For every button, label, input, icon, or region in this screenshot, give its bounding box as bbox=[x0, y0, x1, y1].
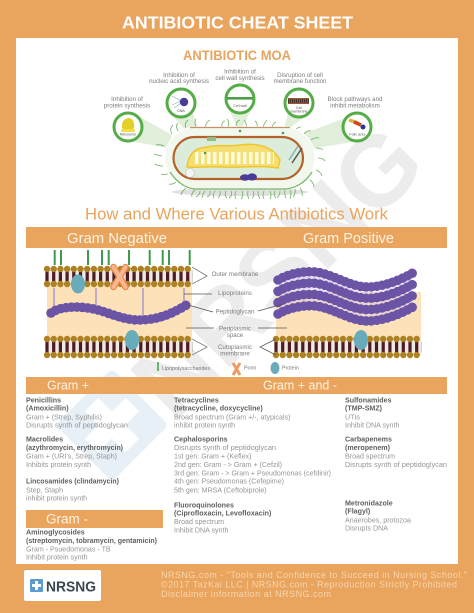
peptidoglycan bbox=[51, 304, 188, 320]
drug list: broad spectrum right: (meropenem) bbox=[345, 444, 391, 452]
drug list: broad spectrum middle: Fluoroquinolones bbox=[174, 501, 234, 509]
diagram labels: Peptidoglycan bbox=[216, 308, 255, 316]
callout: cell membrane function: membrane bbox=[290, 110, 308, 114]
banner: gram negative and gram positive bbox=[26, 227, 447, 248]
lilac gaps bbox=[280, 277, 414, 315]
watermark: NRSNG bbox=[110, 104, 445, 439]
drug list: gram positive: (Amoxicillin) bbox=[26, 405, 69, 413]
drug list: gram positive: (azythromycin, erythromycin) bbox=[26, 444, 124, 452]
protein in inner membrane bbox=[125, 330, 139, 350]
inner membrane bbox=[45, 339, 193, 355]
plasmid blob bbox=[240, 173, 257, 181]
diagram labels: Outer membrane bbox=[212, 271, 259, 278]
membrane protein bbox=[354, 330, 368, 350]
callout: protein synthesis: Ribosome bbox=[120, 132, 136, 136]
diagram: gram negative wall bbox=[45, 250, 193, 355]
drug list: broad spectrum right: Carbapenems bbox=[345, 436, 392, 444]
outer membrane bbox=[45, 269, 193, 284]
footer logo bbox=[24, 570, 101, 601]
callout: cell wall synthesis: Cell wall bbox=[233, 104, 247, 108]
drug list: gram negative: Inhibit protein synth bbox=[26, 554, 88, 562]
drug list: gram negative: Gram - Psuedomonas - TB bbox=[26, 546, 111, 554]
drug list: broad spectrum middle: 1st gen: Gram + (Keflex) bbox=[174, 452, 251, 460]
banner: gram negative list: Gram - bbox=[46, 512, 88, 526]
drug list: gram positive bbox=[26, 396, 128, 502]
drug list: gram positive: Penicillins bbox=[26, 396, 61, 404]
drug list: broad spectrum right: Inhibit DNA synth bbox=[345, 422, 399, 430]
bacterium cell bbox=[154, 119, 325, 199]
callout: nucleic acid synthesis: DNA bbox=[177, 109, 185, 113]
drug list: gram positive: Macrolides bbox=[26, 436, 63, 444]
banner: gram negative and gram positive: Gram Negative bbox=[67, 230, 167, 247]
banner: gram negative list bbox=[26, 510, 163, 528]
lipoproteins bbox=[54, 288, 184, 318]
drug list: broad spectrum middle bbox=[174, 396, 331, 534]
footer text: ©2017 TazKai LLC | NRSNG.com - Reproduction Strictly Prohibited bbox=[161, 580, 457, 590]
connector lines bbox=[184, 267, 287, 355]
drug list: broad spectrum right: (TMP-SMZ) bbox=[345, 405, 383, 413]
pili hairs bbox=[154, 119, 325, 199]
drug list: broad spectrum right: (Flagyl) bbox=[345, 508, 371, 516]
drug list: gram negative: (streptomycin, tobramycin, gentamicin) bbox=[26, 537, 158, 545]
callout: cell membrane function bbox=[274, 72, 327, 117]
callout: nucleic acid synthesis: nucleic acid synthesis bbox=[149, 78, 209, 85]
callout: cell membrane function: Cell bbox=[296, 106, 302, 110]
porin bbox=[114, 267, 126, 287]
drug list: gram positive: Step, Staph bbox=[26, 486, 63, 494]
callout: protein synthesis bbox=[104, 96, 150, 141]
footer text bbox=[161, 570, 467, 599]
diagram: antibiotic mechanisms of action bbox=[104, 68, 383, 199]
callout: nucleic acid synthesis: Inhibition of bbox=[163, 72, 195, 79]
legend bbox=[158, 362, 299, 375]
callout: protein synthesis: Inhibition of bbox=[111, 96, 143, 103]
footer text: Disclaimer information at NRSNG.com bbox=[161, 589, 331, 599]
drug list: broad spectrum middle: 5th gen: MRSA (Ceftobiprole) bbox=[174, 486, 267, 494]
drug list: broad spectrum middle: Inhibit DNA synth bbox=[174, 526, 228, 534]
drug list: gram negative bbox=[26, 528, 158, 562]
drug list: gram positive: Inhibits protein synth bbox=[26, 461, 91, 469]
drug list: gram positive: inhibit protein synth bbox=[26, 494, 87, 502]
drug list: broad spectrum right: Broad spectrum bbox=[345, 452, 395, 460]
drug list: broad spectrum middle: inhibit protein synth bbox=[174, 422, 235, 430]
periplasmic space bbox=[276, 292, 421, 340]
diagram: gram positive wall bbox=[274, 271, 422, 355]
drug list: broad spectrum middle: 2nd gen: Gram - > Gram + (Cefzil) bbox=[174, 461, 282, 469]
drug list: gram positive: Lincosamides (clindamycin) bbox=[26, 478, 120, 486]
callout: nucleic acid synthesis bbox=[149, 72, 209, 117]
cytoplasmic membrane bbox=[274, 339, 422, 355]
drug list: broad spectrum right: Disrupts synth of peptidoglycan bbox=[345, 461, 447, 469]
drug list: broad spectrum right: UTIs bbox=[345, 413, 360, 421]
callout: cell membrane function: Disruption of cell bbox=[277, 72, 323, 79]
callout: block metabolism: inhibit metabolism bbox=[330, 102, 380, 110]
diagram labels: membrane bbox=[220, 350, 250, 358]
peptidoglycan layers bbox=[278, 271, 416, 321]
drug list: broad spectrum right: Sulfonamides bbox=[345, 396, 392, 404]
drug list: gram negative: Aminoglycosides bbox=[26, 528, 85, 536]
drug list: gram positive: Disrupts synth of peptidoglycan bbox=[26, 422, 128, 430]
diagram labels: Cutoplasmic bbox=[218, 344, 252, 351]
footer text: NRSNG.com - "Tools and Confidence to Succeed in Nursing School." bbox=[161, 570, 467, 580]
drug list: broad spectrum middle: 3rd gen: Gram - > Gram + Pseudomonas (cefdinir) bbox=[174, 469, 331, 477]
drug list: broad spectrum right: Anaerobes, protozoa bbox=[345, 516, 411, 524]
drug list: broad spectrum middle: (tetracycline, doxycycline) bbox=[174, 405, 263, 413]
drug list: broad spectrum middle: Broad spectrum (Gram +/-, atypicals) bbox=[174, 413, 290, 421]
title: ANTIBIOTIC CHEAT SHEET bbox=[122, 12, 353, 32]
antibiotic rods bbox=[289, 146, 298, 160]
drug list: broad spectrum middle: 4th gen: Pseudomonas (Cefepime) bbox=[174, 478, 284, 486]
heading: how and where: How and Where Various Antibiotics Work bbox=[85, 206, 389, 224]
protein in outer membrane bbox=[71, 274, 85, 294]
banner: gram negative and gram positive: Gram Positive bbox=[303, 230, 394, 247]
diagram labels: space bbox=[227, 332, 244, 339]
heading: antibiotic MOA: ANTIBIOTIC MOA bbox=[183, 48, 291, 63]
callout: cell membrane function: membrane function bbox=[274, 78, 327, 85]
callout: protein synthesis: protein synthesis bbox=[104, 102, 150, 110]
drug list: broad spectrum middle: Broad spectrum bbox=[174, 518, 224, 526]
diagram labels: Lipoproteins bbox=[218, 290, 252, 297]
nucleoid bbox=[187, 144, 280, 168]
banner: gram positive and both: Gram + bbox=[47, 378, 89, 392]
drug list: broad spectrum right bbox=[345, 396, 447, 532]
callout: block metabolism: Block pathways and bbox=[327, 96, 383, 103]
drug list: broad spectrum right: Disrupts DNA bbox=[345, 524, 388, 532]
banner: gram positive and both: Gram + and - bbox=[263, 378, 337, 392]
drug list: broad spectrum middle: Tetracyclines bbox=[174, 396, 219, 404]
callout: cell wall synthesis: Inhibition of bbox=[224, 68, 256, 76]
ribosome ball bbox=[186, 168, 194, 178]
drug list: gram positive: Gram + (URI's, Strep, Staph) bbox=[26, 452, 117, 460]
diagram labels bbox=[184, 267, 287, 358]
callout: cell wall synthesis: cell wall synthesis bbox=[215, 75, 265, 82]
callout: block metabolism bbox=[327, 96, 383, 141]
drug list: gram positive: Gram + (Strep, Syphilis) bbox=[26, 413, 102, 421]
footer logo: NRSNG bbox=[46, 580, 96, 596]
drug list: broad spectrum middle: Disrupts synth of peptidoglycan bbox=[174, 444, 276, 452]
drug list: broad spectrum right: Metronidazole bbox=[345, 499, 393, 507]
drug list: broad spectrum middle: (Ciprofloxacin, Levofloxacin) bbox=[174, 510, 272, 518]
legend: Porin bbox=[244, 366, 256, 372]
lipopolysaccharides bbox=[55, 250, 190, 265]
callout: cell wall synthesis bbox=[215, 68, 265, 113]
legend: Protein bbox=[282, 366, 299, 372]
legend: Lipopolysaccharides bbox=[162, 366, 210, 372]
periplasmic space bbox=[47, 285, 192, 340]
green target marks bbox=[204, 130, 284, 154]
diagram labels: Periplasmic bbox=[219, 326, 251, 332]
banner: gram positive and both bbox=[26, 377, 447, 394]
callout cones bbox=[130, 108, 352, 153]
callout: block metabolism: Folic acid bbox=[349, 132, 365, 136]
drug list: broad spectrum middle: Cephalosporins bbox=[174, 436, 228, 444]
